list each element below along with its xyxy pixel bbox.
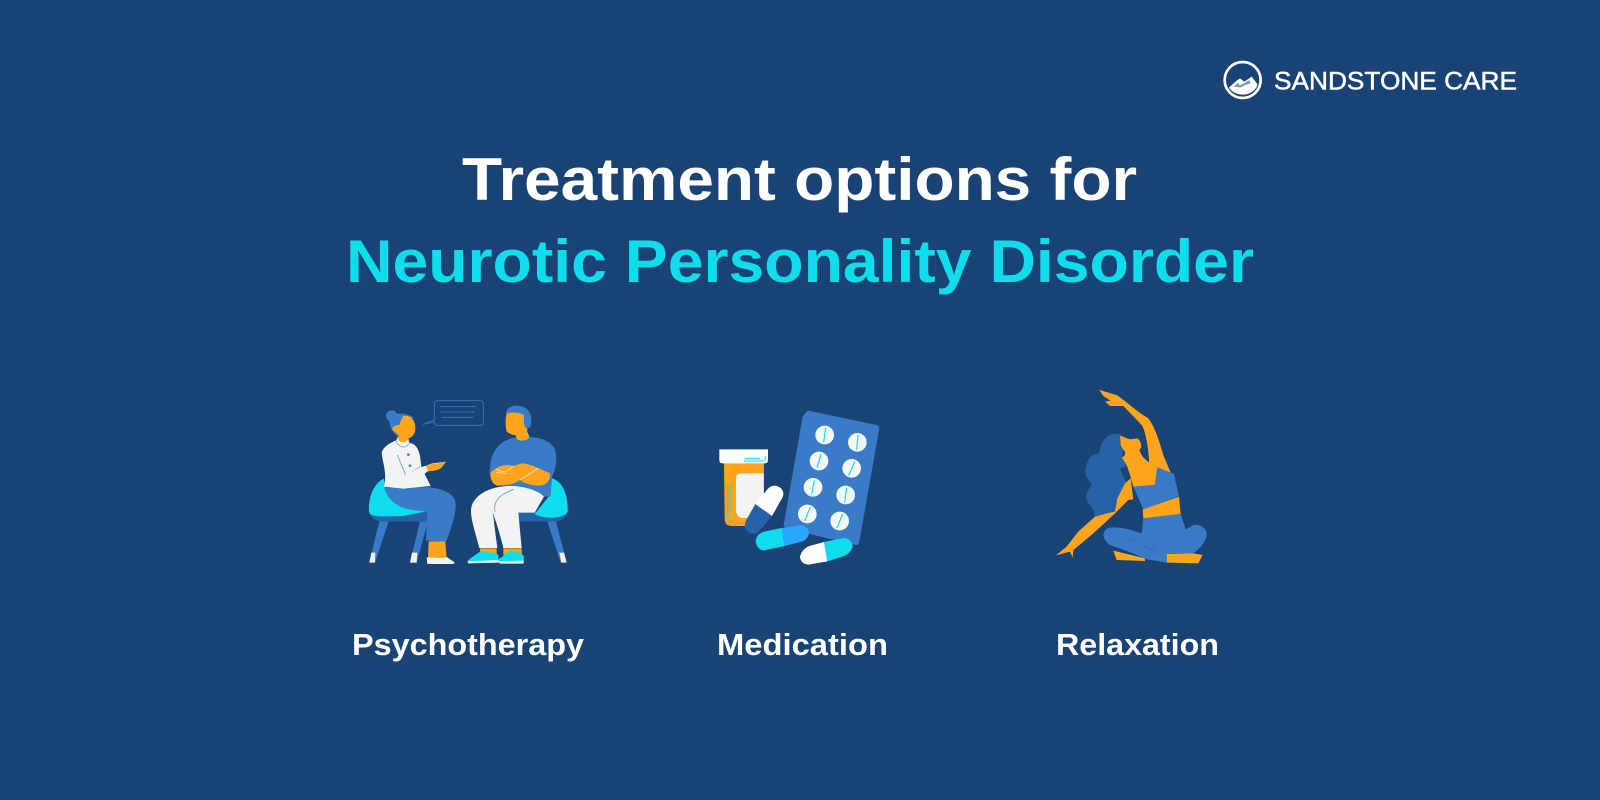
client figure <box>467 406 556 564</box>
blister pack <box>784 411 879 545</box>
arms and torso skin <box>1056 390 1203 563</box>
label: Medication: Medication <box>717 628 888 662</box>
panel: relaxation <box>1056 390 1219 662</box>
gap between neck and hair <box>1120 465 1132 482</box>
capsule: white and dark blue <box>745 486 783 534</box>
icon: mountain in circle <box>1225 62 1261 98</box>
hair <box>1085 434 1132 517</box>
title line 2: Neurotic Personality Disorder <box>346 228 1254 295</box>
capsule: cyan and blue <box>756 525 809 550</box>
client chair <box>490 478 568 563</box>
label: Relaxation: Relaxation <box>1056 628 1219 662</box>
therapist figure <box>382 410 456 564</box>
logo: Sandstone Care <box>1225 62 1517 98</box>
pill bottle <box>719 449 768 526</box>
panel: psychotherapy <box>352 401 584 662</box>
top and leggings <box>1104 467 1207 563</box>
label: Psychotherapy: Psychotherapy <box>352 628 584 662</box>
title <box>346 146 1254 295</box>
title line 1: Treatment options for <box>462 146 1137 213</box>
icon: woman stretching in seated yoga pose <box>1056 390 1207 563</box>
therapist chair <box>369 479 428 563</box>
speech bubble <box>423 401 483 425</box>
icon: therapist and client seated <box>369 401 568 564</box>
logo wordmark: SANDSTONE CARE <box>1274 68 1517 96</box>
icon: pill bottle and blister pack <box>719 411 879 565</box>
capsule: white and cyan <box>800 538 853 565</box>
panel: medication <box>717 411 888 662</box>
